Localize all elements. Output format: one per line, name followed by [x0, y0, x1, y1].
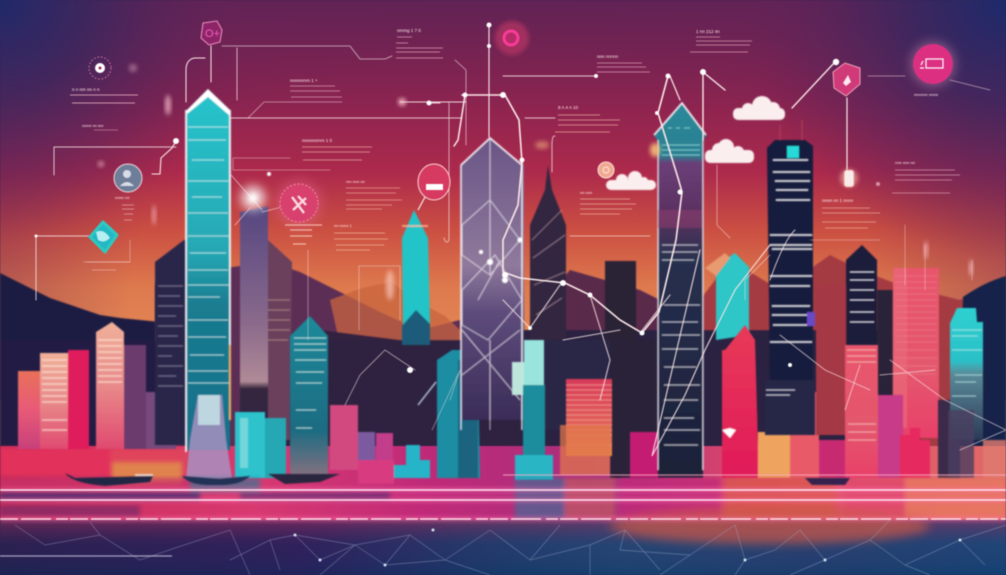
icon: large pink circle with screen — [910, 41, 956, 87]
building: orange low-rise — [18, 371, 40, 449]
text block: annotation 7: 1 nn 212 4n — [696, 29, 720, 34]
text block: top centre annotation — [396, 28, 443, 58]
slim cyan tower — [402, 210, 430, 345]
central glass tower with network lines — [460, 138, 524, 430]
text block: pink circle caption — [285, 225, 322, 244]
text block: annotation 4: mn nnn nn — [346, 179, 365, 184]
text block: annotation 9: nn nnn — [580, 190, 592, 195]
text block: annotation 11: nnnn nn 1 nnnn — [822, 198, 854, 203]
text block: annotation 2: nnnnnmm 1 + — [290, 78, 318, 83]
building: mauve block — [124, 345, 146, 449]
text block: annotation 11 — [822, 198, 880, 228]
sea with polygon network — [0, 508, 1006, 575]
dark buildings behind center — [530, 261, 656, 478]
building: purple low-rise — [146, 392, 176, 449]
red gabled building — [722, 325, 847, 478]
icon: pink glowing circle — [275, 179, 323, 227]
glowing horizontal light lines — [0, 475, 1006, 519]
boat: central vessel — [182, 476, 250, 485]
connector lines network — [36, 25, 1006, 456]
text block: annotation 5 — [334, 223, 388, 250]
text block: annotation 6 — [597, 54, 650, 72]
text block: top centre annotation: nmmg 1 7 0 — [397, 28, 421, 33]
building: peach striped tower — [96, 322, 124, 449]
text block: profile caption: nnnn nn — [115, 195, 129, 200]
text block: annotation 2 — [290, 78, 342, 97]
cloud: lower — [606, 171, 656, 190]
icon: white target badge — [89, 57, 111, 79]
network nodes — [34, 22, 839, 373]
icon: magenta hexagon badge — [201, 21, 222, 45]
cloud: upper — [733, 96, 785, 120]
main cyan tower — [186, 89, 232, 480]
boat: left vessel — [65, 473, 153, 486]
icon: top pink ring — [495, 21, 529, 55]
cyan right tower — [948, 308, 1006, 478]
boats on the water — [65, 473, 850, 486]
icon: glowing lantern node — [840, 169, 858, 187]
soft light spots — [98, 64, 973, 300]
dark tower with white stripes — [765, 120, 815, 435]
left waterfront buildings — [18, 322, 176, 449]
icon: magenta hexagon badge: O+ — [205, 28, 220, 40]
tall pink tower — [877, 268, 939, 438]
icon: grey-blue profile circle — [114, 164, 142, 192]
text block: annotation 8 — [555, 105, 620, 132]
main right tower — [654, 103, 706, 478]
boat: right vessel — [805, 478, 850, 485]
icon: teal rounded diamond — [90, 222, 117, 252]
building: dark tower behind main tower — [155, 240, 188, 445]
pink and purple low blocks — [330, 405, 430, 484]
teal tower — [290, 316, 328, 478]
text block: annotation 5: nn nnnn 1 — [334, 223, 353, 228]
text block: annotation 4 — [346, 179, 402, 209]
text block: profile caption — [115, 195, 134, 220]
text block: top-left caption — [70, 87, 138, 130]
text block: top-left caption: n n nm nn n n — [72, 87, 100, 92]
text block: annotation 3 — [302, 138, 372, 160]
mountains and dark skyline backdrop — [0, 255, 1006, 465]
boat: dark barge — [268, 474, 340, 484]
purple tower with light beacon — [240, 206, 292, 440]
teal building cluster — [418, 350, 480, 478]
pink block — [845, 345, 960, 478]
building reflections on the water — [0, 478, 1006, 520]
light teal tower — [512, 340, 553, 480]
icon: pale badge with swirl — [598, 162, 614, 178]
text block: annotation 10: nnn nnn nn — [895, 160, 915, 165]
cloud: middle — [705, 139, 754, 163]
icon: pink shield badge — [833, 63, 860, 96]
text block: pink badge caption: mnnnnn nmnn — [914, 93, 938, 97]
text block: teal badge caption — [87, 262, 130, 270]
striped red-orange block — [560, 379, 666, 478]
building: coral striped block — [40, 353, 69, 449]
text block: annotation 6: nnn nnnnn — [597, 54, 619, 59]
dark spire building — [530, 165, 566, 345]
icon: pink oval badge — [418, 164, 450, 210]
text block: annotation 3: nnnnnnmm 1 0 — [302, 138, 333, 143]
clouds — [606, 96, 785, 190]
text block: top-left caption: nnnnn nn nnn — [82, 124, 103, 128]
text block: annotation 8: 8 A 4 A 10 — [558, 105, 579, 110]
text block: annotation 10 — [892, 160, 960, 193]
building: magenta block — [68, 350, 89, 449]
text block: annotation 7 — [690, 29, 752, 52]
dark gabled building — [816, 245, 877, 435]
cyan gabled tower — [705, 253, 749, 340]
cyan low-rise cluster — [235, 412, 286, 478]
harbour water — [0, 446, 1006, 520]
text block: annotation 9 — [580, 190, 636, 214]
